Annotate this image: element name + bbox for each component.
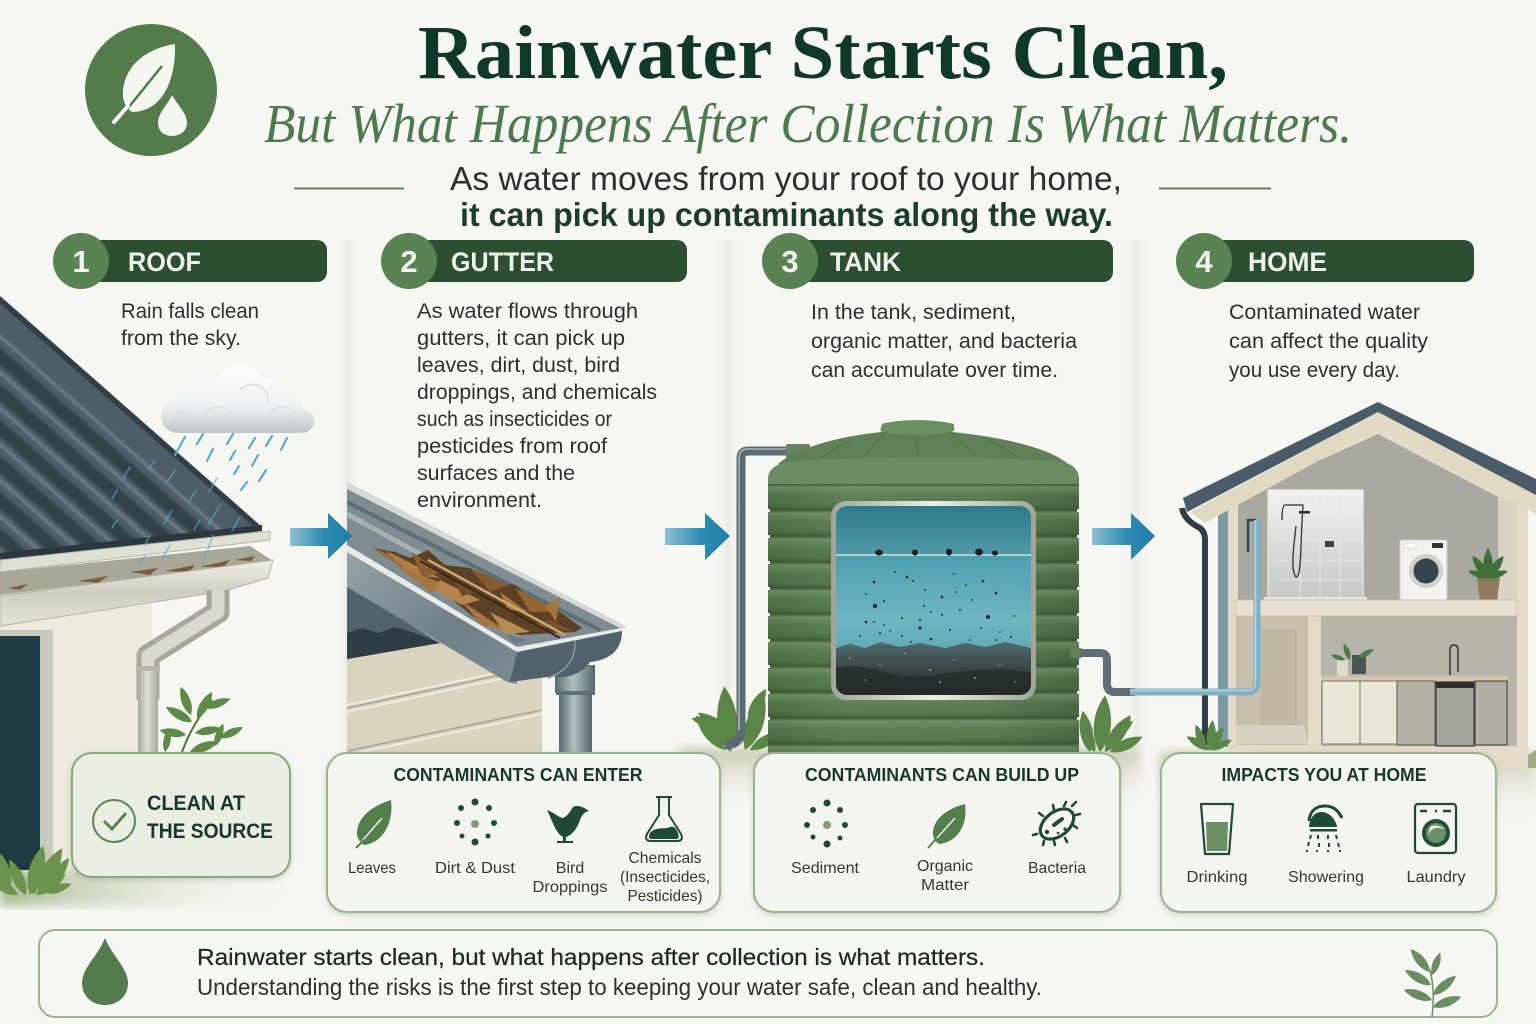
floor slab (1235, 600, 1517, 616)
step 3 text: can accumulate over time. (811, 358, 1058, 382)
step 1 text (121, 299, 259, 350)
panel: impacts you at home: Showering (1288, 869, 1364, 886)
shrub (1185, 720, 1233, 754)
panel: home scene (1130, 402, 1536, 822)
arrow: tank to home (1092, 513, 1155, 560)
gutter channel (347, 482, 627, 684)
step 1 header (53, 233, 327, 289)
logo: leaf and droplet (85, 24, 217, 156)
sediment flecks (849, 652, 1016, 683)
panel: contaminants can build up (754, 753, 1120, 912)
callout: clean at the source: THE SOURCE (147, 820, 273, 843)
grass clump (0, 844, 73, 899)
icon: organic matter leaf (928, 804, 965, 848)
label: organic matter: Organic (917, 858, 973, 875)
downpipe (136, 590, 218, 752)
step 3 text: organic matter, and bacteria (811, 329, 1077, 353)
label: chemicals: (Insecticides, (620, 869, 710, 886)
lower left room (1236, 616, 1308, 745)
summary text: Understanding the risks is the first step to keeping your water safe, clean and healthy. (197, 974, 1042, 1000)
step 4 header (1176, 233, 1474, 289)
plant (159, 685, 245, 756)
panel: tank scene (680, 420, 1145, 808)
step 4 text: you use every day. (1229, 358, 1400, 382)
panel: impacts you at home: Laundry (1406, 869, 1466, 886)
step 2 text: droppings, and chemicals (417, 380, 657, 404)
step 2 text (417, 299, 657, 512)
arrow: gutter to tank (665, 513, 730, 560)
service pipe hook (1248, 520, 1256, 552)
step 3 header: TANK (830, 247, 901, 277)
tank window (831, 501, 1036, 700)
icon: bacteria (1033, 802, 1080, 845)
panel: contaminants can build up: Bacteria (1028, 860, 1086, 877)
potted plant (1467, 548, 1509, 600)
downpipe and gutter (1182, 508, 1205, 745)
step 2 header: 2 (400, 244, 418, 279)
intro text: it can pick up contaminants along the way. (460, 196, 1113, 233)
icon: bird (547, 806, 589, 843)
panel: contaminants can enter: Dirt & Dust (435, 860, 516, 877)
step 3 text (811, 300, 1077, 382)
lower roof (347, 585, 440, 659)
downspout (555, 665, 595, 753)
summary text (197, 944, 1042, 1000)
panel: contaminants can build up: Sediment (791, 860, 860, 877)
panel: contaminants can build up: CONTAMINANTS CAN BUILD UP (805, 764, 1079, 785)
icon: chemical flask (646, 797, 682, 841)
left plant (690, 685, 784, 755)
label: bird droppings (532, 860, 608, 896)
icon: dirt and dust (454, 798, 497, 846)
step 3 header: 3 (781, 244, 799, 279)
ground grass (0, 868, 300, 906)
blue column (1218, 507, 1228, 747)
roof (0, 296, 262, 560)
tank body (768, 420, 1079, 753)
step 2 header: GUTTER (451, 247, 554, 277)
rain drops (112, 434, 287, 564)
step 2 text: pesticides from roof (417, 434, 607, 458)
arrow: roof to gutter (290, 513, 352, 559)
kitchen (1321, 616, 1517, 746)
subtitle: But What Happens After Collection Is What Matters. (264, 93, 1352, 154)
icon: check (93, 800, 135, 842)
outlet pipe (1070, 648, 1135, 692)
icon: drinking glass (1201, 804, 1233, 854)
ground shadow (680, 748, 1140, 808)
leaf debris (370, 547, 582, 644)
step 4 text (1229, 300, 1428, 382)
step 1 header: 1 (72, 244, 90, 279)
icon: shower (1307, 806, 1342, 852)
right plant (1075, 694, 1145, 757)
icon: water drop (82, 938, 128, 1005)
step 2 text: leaves, dirt, dust, bird (417, 353, 620, 377)
intro text (450, 160, 1122, 233)
step 2 header (381, 233, 687, 289)
panel: contaminants can enter: CONTAMINANTS CAN ENTER (394, 764, 642, 785)
step 1 header: ROOF (128, 247, 201, 277)
gable wall (1238, 434, 1498, 600)
fascia (0, 531, 270, 572)
house body (1228, 425, 1528, 770)
label: chemicals: Chemicals (628, 850, 702, 867)
label: chemicals: Pesticides) (628, 888, 702, 905)
panel: impacts you at home: Drinking (1186, 869, 1248, 886)
title: Rainwater Starts Clean, (418, 11, 1228, 95)
step 3 header (762, 233, 1113, 289)
panel: roof scene (0, 290, 320, 906)
step 4 header: HOME (1248, 247, 1327, 277)
step 4 header: 4 (1195, 244, 1213, 279)
step 2 text: such as insecticides or (417, 407, 612, 431)
label: organic matter (917, 858, 973, 894)
panel: contaminants can enter: Leaves (348, 860, 396, 877)
label: organic matter: Matter (921, 877, 970, 894)
icon: leaf (356, 800, 391, 848)
step 3 text: In the tank, sediment, (811, 300, 1016, 324)
label: chemicals (620, 850, 710, 905)
step 2 text: As water flows through (417, 299, 638, 323)
icon: washing machine (1415, 804, 1456, 853)
step 4 text: Contaminated water (1229, 300, 1420, 324)
step 2 text: gutters, it can pick up (417, 326, 625, 350)
washing machine (1400, 540, 1447, 600)
intro text: As water moves from your roof to your home, (450, 160, 1122, 197)
panel: contaminants can enter (327, 753, 720, 912)
blue water pipe (1130, 520, 1257, 692)
step 2 text: surfaces and the (417, 461, 575, 485)
inlet pipe (725, 444, 810, 745)
icon: leaf sprig (1402, 946, 1463, 1017)
cloud (161, 365, 314, 433)
label: bird droppings: Droppings (532, 879, 608, 896)
step 2 text: environment. (417, 488, 542, 512)
panel: impacts you at home (1161, 753, 1496, 912)
panel: impacts you at home: IMPACTS YOU AT HOME (1222, 764, 1426, 785)
callout: clean at the source (72, 753, 290, 877)
shower (1264, 490, 1367, 600)
label: bird droppings: Bird (556, 860, 584, 877)
siding (347, 640, 542, 755)
particles (859, 571, 1015, 643)
rib edges (768, 509, 1079, 720)
panel: gutter scene (347, 482, 627, 755)
step 1 text: Rain falls clean (121, 299, 259, 323)
sediment (836, 642, 1031, 695)
water line (836, 554, 1031, 556)
door (0, 630, 53, 870)
panel: bottom summary (39, 930, 1497, 1017)
roof (1183, 402, 1536, 523)
step 1 text: from the sky. (121, 326, 241, 350)
gutter (0, 546, 273, 626)
step 4 text: can affect the quality (1229, 329, 1428, 353)
wall (0, 604, 152, 870)
summary text: Rainwater starts clean, but what happens after collection is what matters. (197, 944, 985, 970)
floating debris (875, 548, 998, 556)
ground (1160, 752, 1536, 822)
icon: sediment (804, 800, 848, 848)
callout: clean at the source: CLEAN AT (147, 792, 245, 815)
